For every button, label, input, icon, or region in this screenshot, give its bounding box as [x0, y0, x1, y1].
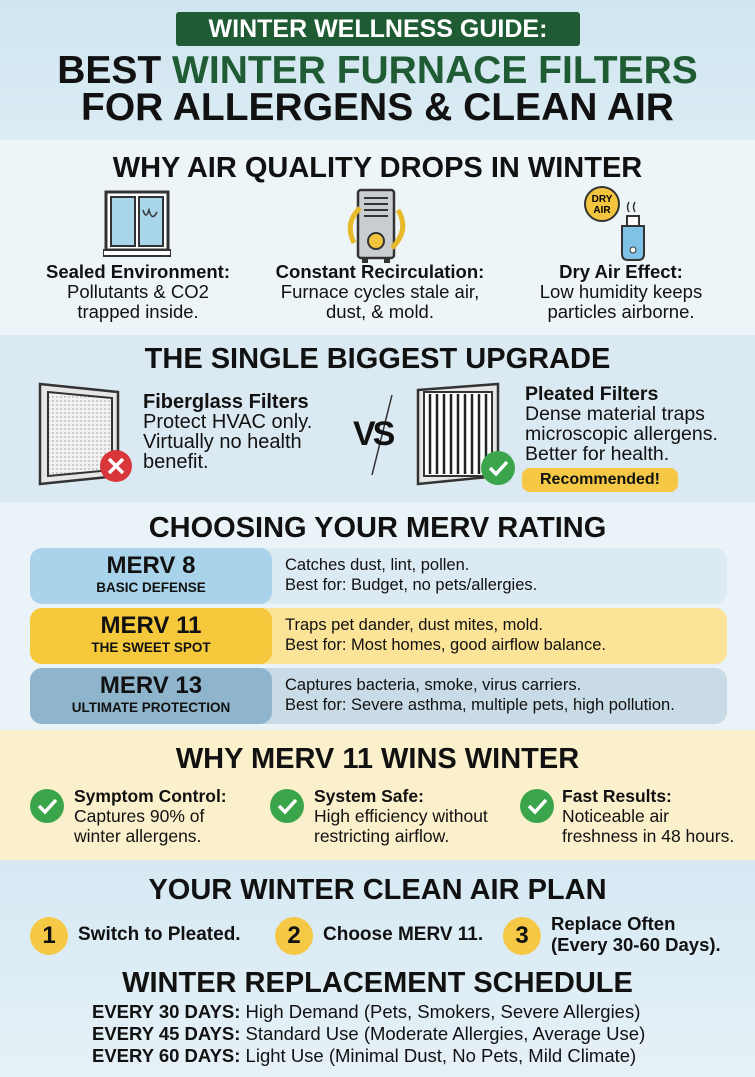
title: FOR ALLERGENS & CLEAN AIR	[81, 86, 674, 129]
step 2: Choose MERV 11.	[323, 924, 483, 945]
panel: clean air plan and schedule	[0, 860, 755, 1077]
text: sealed environment	[46, 261, 230, 322]
text: constant recirculation	[276, 261, 484, 322]
item: symptom control: Captures 90% of	[74, 806, 204, 826]
row: merv 8: BASIC DEFENSE	[96, 580, 206, 595]
row: merv 13: Best for: Severe asthma, multiple pets, high pollution.	[285, 696, 675, 714]
row: merv 13	[30, 668, 727, 724]
schedule list	[92, 1001, 645, 1066]
item: fast results: Noticeable air	[562, 806, 669, 826]
panel: choosing merv rating	[0, 502, 755, 730]
text: constant recirculation: dust, & mold.	[326, 301, 434, 322]
schedule list: EVERY 45 DAYS: Standard Use (Moderate Allergies, Average Use)	[92, 1023, 645, 1044]
text: fiberglass filters	[143, 391, 312, 473]
heading: THE SINGLE BIGGEST UPGRADE	[145, 343, 610, 375]
vs: VS	[353, 415, 392, 453]
step 3	[503, 913, 721, 955]
heading: WHY AIR QUALITY DROPS IN WINTER	[113, 152, 642, 184]
item: system safe	[270, 786, 488, 846]
text: sealed environment: trapped inside.	[77, 301, 199, 322]
item: system safe: System Safe:	[314, 786, 424, 806]
item: fast results: Fast Results:	[562, 786, 672, 806]
icon: window	[103, 190, 171, 257]
panel: why merv 11 wins	[0, 730, 755, 860]
text: sealed environment: Pollutants & CO2	[67, 281, 209, 302]
text: pleated filters: Better for health.	[525, 443, 669, 465]
badge: recommended: Recommended!	[540, 471, 660, 488]
row: merv 13: ULTIMATE PROTECTION	[72, 700, 230, 715]
row: merv 8: MERV 8	[107, 552, 195, 579]
heading: clean air plan: YOUR WINTER CLEAN AIR PLAN	[148, 874, 607, 906]
item: symptom control: Symptom Control:	[74, 786, 227, 806]
step 1: Switch to Pleated.	[78, 924, 241, 945]
row: merv 13: Captures bacteria, smoke, virus carriers.	[285, 676, 581, 694]
header band	[0, 0, 755, 140]
text: dry air effect	[540, 261, 702, 322]
badge: winter wellness guide	[176, 12, 580, 46]
text: fiberglass filters: Fiberglass Filters	[143, 391, 309, 413]
panel: why air quality drops	[0, 140, 755, 335]
step 3: (Every 30-60 Days).	[551, 934, 721, 955]
icon: dry air humidifier: DRY	[592, 194, 613, 205]
item: system safe: High efficiency without	[314, 806, 488, 826]
row: merv 11: Best for: Most homes, good airflow balance.	[285, 636, 606, 654]
item: fast results	[520, 786, 734, 846]
schedule list: EVERY 60 DAYS: Light Use (Minimal Dust, No Pets, Mild Climate)	[92, 1045, 636, 1066]
row: merv 8: Catches dust, lint, pollen.	[285, 556, 469, 574]
row: merv 13: MERV 13	[100, 672, 202, 699]
item: symptom control	[30, 786, 227, 846]
icon: pleated filter	[416, 382, 515, 486]
schedule list: EVERY 30 DAYS: High Demand (Pets, Smokers, Severe Allergies)	[92, 1001, 640, 1022]
text: pleated filters: Pleated Filters	[525, 383, 658, 405]
item: fast results: freshness in 48 hours.	[562, 826, 734, 846]
text: fiberglass filters: Virtually no health	[143, 431, 302, 453]
step 3: Replace Often	[551, 913, 675, 934]
text: fiberglass filters: benefit.	[143, 451, 209, 473]
badge: winter wellness guide: WINTER WELLNESS GUIDE:	[209, 15, 547, 43]
text: sealed environment: Sealed Environment:	[46, 261, 230, 282]
heading: WHY MERV 11 WINS WINTER	[176, 743, 579, 775]
icon: dry air humidifier: AIR	[593, 205, 611, 216]
row: merv 11: MERV 11	[101, 612, 201, 639]
icon: fiberglass filter	[38, 382, 132, 486]
text: pleated filters: microscopic allergens.	[525, 423, 718, 445]
row: merv 8: Best for: Budget, no pets/allergies.	[285, 576, 537, 594]
text: dry air effect: Low humidity keeps	[540, 281, 702, 302]
step 1	[30, 917, 241, 955]
title: BEST WINTER FURNACE FILTERS	[57, 49, 698, 92]
item: symptom control: winter allergens.	[74, 826, 201, 846]
step 1: 1	[42, 922, 56, 949]
icon: dry air humidifier	[584, 186, 645, 261]
text: fiberglass filters: Protect HVAC only.	[143, 411, 312, 433]
panel: single biggest upgrade	[0, 335, 755, 502]
text: pleated filters: Dense material traps	[525, 403, 705, 425]
heading: CHOOSING YOUR MERV RATING	[149, 512, 606, 544]
title	[57, 49, 698, 129]
item: system safe: restricting airflow.	[314, 826, 449, 846]
heading: replacement schedule: WINTER REPLACEMENT SCHEDULE	[122, 967, 633, 999]
step 2: 2	[287, 922, 301, 949]
text: dry air effect: Dry Air Effect:	[559, 261, 683, 282]
text: constant recirculation: Furnace cycles stale air,	[281, 281, 479, 302]
row: merv 11	[30, 608, 727, 664]
row: merv 8	[30, 548, 727, 604]
step 3: 3	[515, 922, 529, 949]
step 2	[275, 917, 483, 955]
text: pleated filters	[525, 383, 718, 465]
vs	[353, 395, 394, 475]
text: constant recirculation: Constant Recirculation:	[276, 261, 484, 282]
row: merv 11: THE SWEET SPOT	[91, 640, 211, 655]
row: merv 11: Traps pet dander, dust mites, mold.	[285, 616, 543, 634]
text: dry air effect: particles airborne.	[547, 301, 695, 322]
icon: furnace recirculation	[348, 188, 406, 263]
badge: recommended	[522, 468, 678, 492]
